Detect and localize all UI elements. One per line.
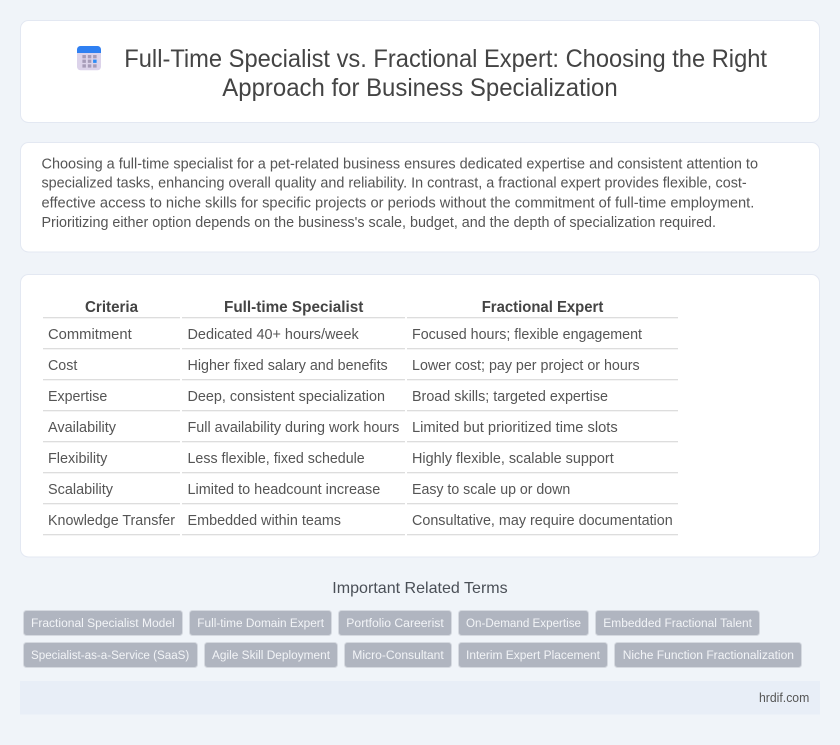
table row: cost	[48, 358, 640, 374]
tag	[596, 610, 760, 636]
table row: cost: Higher fixed salary and benefits	[188, 358, 388, 374]
table row: commitment	[48, 327, 642, 343]
tag	[344, 642, 452, 668]
tag: Specialist-as-a-Service (SaaS)	[31, 648, 189, 662]
tag: Niche Function Fractionalization	[623, 648, 794, 662]
tag: Agile Skill Deployment	[212, 648, 331, 662]
table row: scalability: Scalability	[48, 482, 114, 498]
panel: header	[20, 20, 820, 122]
tag	[24, 642, 198, 668]
text block: introduction: specialized tasks, enhancing overall quality and reliability. In contrast, a fractional expert provides flexible, cost-	[42, 176, 747, 192]
table row: availability: Limited but prioritized time slots	[412, 420, 618, 436]
table header: Fractional Expert	[482, 299, 604, 316]
title: Approach for Business Specialization	[222, 74, 618, 102]
tag: On-Demand Expertise	[466, 616, 581, 630]
table row: knowledge transfer	[48, 513, 673, 529]
footer	[20, 681, 820, 714]
table row: availability: Full availability during work hours	[188, 420, 399, 436]
heading: related terms: Important Related Terms	[332, 580, 508, 597]
table row: knowledge transfer: Knowledge Transfer	[48, 513, 175, 529]
tag: Micro-Consultant	[352, 648, 444, 662]
tag: Full-time Domain Expert	[197, 616, 325, 630]
table header: Criteria	[85, 299, 138, 316]
text block: introduction	[42, 156, 758, 231]
table row: expertise	[48, 389, 608, 405]
tag: Interim Expert Placement	[466, 648, 601, 662]
tag: Portfolio Careerist	[346, 616, 444, 630]
text block: introduction: Choosing a full-time specialist for a pet-related business ensures dedicated expertise and consistent attention to	[42, 156, 758, 172]
text block: introduction: Prioritizing either option depends on the business's scale, budget, and the depth of specialization required.	[42, 215, 716, 231]
table row: flexibility: Flexibility	[48, 451, 108, 467]
table row: flexibility: Highly flexible, scalable support	[412, 451, 614, 467]
icon: calendar	[77, 46, 101, 70]
table row: flexibility	[48, 451, 614, 467]
title	[124, 45, 767, 102]
table row: cost: Cost	[48, 358, 77, 374]
table row: commitment: Dedicated 40+ hours/week	[188, 327, 359, 343]
tag	[24, 610, 182, 636]
table header: Full-time Specialist	[224, 299, 364, 316]
table row: knowledge transfer: Embedded within teams	[188, 513, 341, 529]
table row: knowledge transfer: Consultative, may require documentation	[412, 513, 673, 529]
table row: cost: Lower cost; pay per project or hours	[412, 358, 640, 374]
table row: availability	[48, 420, 618, 436]
tag: Embedded Fractional Talent	[603, 616, 753, 630]
tag	[204, 642, 338, 668]
tag: Fractional Specialist Model	[31, 616, 175, 630]
table row: expertise: Expertise	[48, 389, 107, 405]
table row: commitment: Focused hours; flexible engagement	[412, 327, 642, 343]
table row: flexibility: Less flexible, fixed schedule	[188, 451, 365, 467]
tag	[614, 642, 802, 668]
panel: comparison table	[20, 274, 820, 557]
footer source text: hrdif.com	[759, 690, 809, 705]
text block: introduction: effective access to niche skills for specific projects or periods without the commitment of full-time employment.	[42, 196, 754, 212]
tag	[458, 610, 588, 636]
table row: scalability	[48, 482, 570, 498]
table row: availability: Availability	[48, 420, 117, 436]
table row: scalability: Easy to scale up or down	[412, 482, 570, 498]
related terms tags	[24, 610, 802, 668]
tag	[190, 610, 332, 636]
tag	[338, 610, 452, 636]
table row: commitment: Commitment	[48, 327, 132, 343]
table row: expertise: Broad skills; targeted expertise	[412, 389, 608, 405]
table row: scalability: Limited to headcount increase	[188, 482, 380, 498]
table row: expertise: Deep, consistent specialization	[188, 389, 385, 405]
table header	[85, 299, 604, 316]
title: Full-Time Specialist vs. Fractional Expert: Choosing the Right	[124, 45, 767, 73]
panel: introduction	[20, 142, 820, 252]
tag	[458, 642, 608, 668]
